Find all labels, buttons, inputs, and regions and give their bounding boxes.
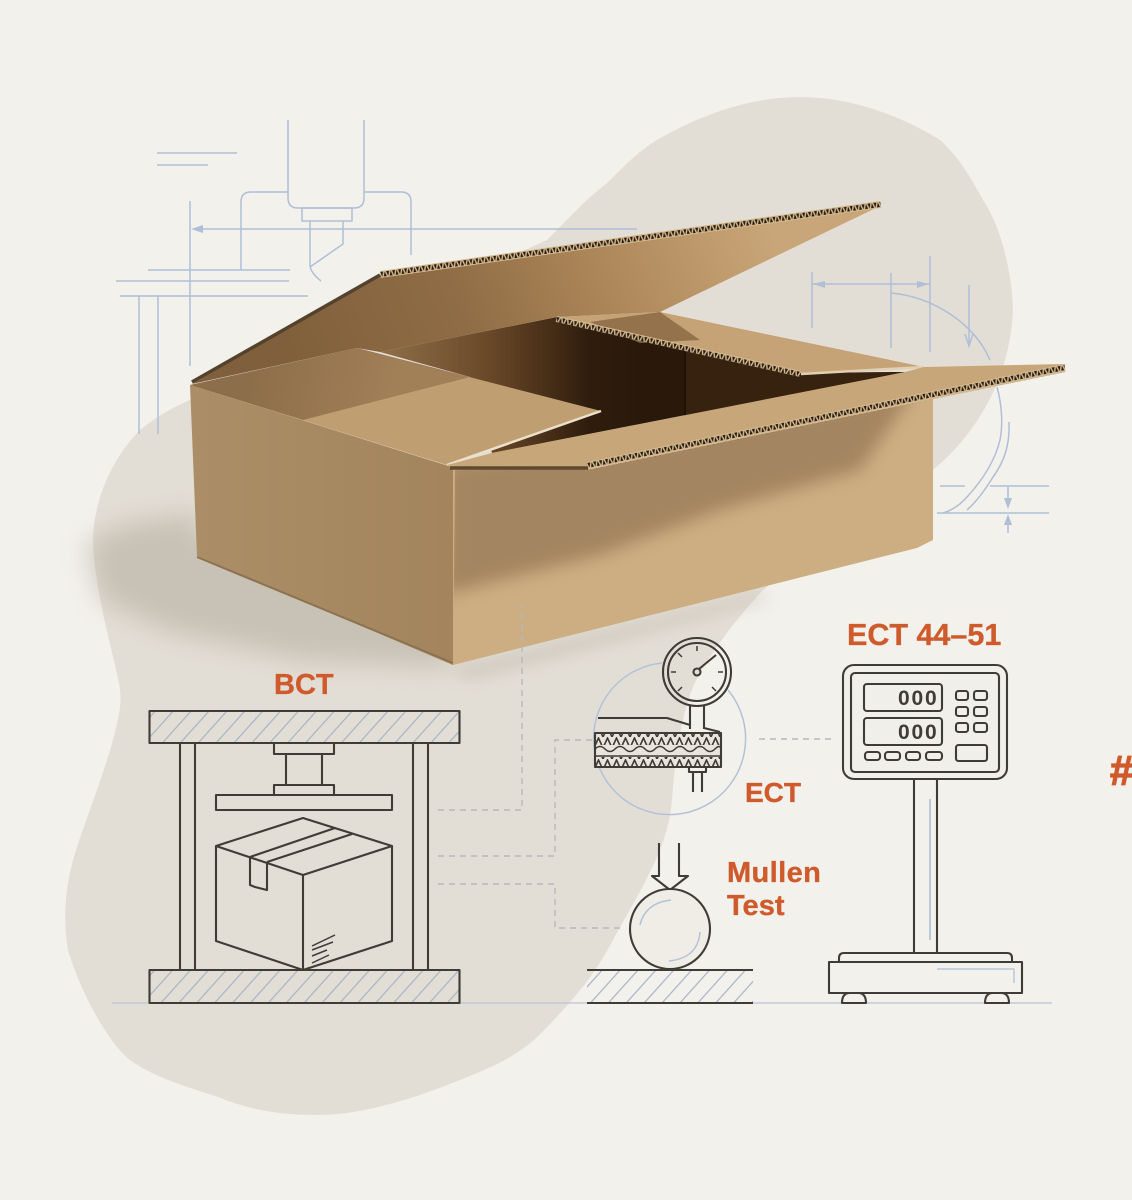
left flap thin edge bbox=[447, 411, 601, 465]
pole bbox=[914, 779, 937, 953]
cardboard box bbox=[190, 201, 1066, 665]
display two: 000 bbox=[898, 721, 938, 744]
background blob bbox=[65, 97, 1013, 1115]
lower stem bbox=[689, 767, 706, 792]
taped box bbox=[216, 818, 392, 970]
label: Mullen Test: Test bbox=[727, 890, 785, 922]
lower buttons bbox=[865, 752, 942, 760]
right back flap bbox=[557, 312, 924, 373]
blueprint: dimension lines and curve, right bbox=[812, 256, 1049, 533]
infographic canvas bbox=[65, 97, 1132, 1115]
press columns bbox=[180, 743, 428, 970]
pole highlight bbox=[929, 799, 931, 940]
label: BCT: BCT bbox=[274, 669, 334, 701]
right back flap thin edge bbox=[801, 367, 924, 374]
down arrow bbox=[652, 843, 688, 890]
ram bbox=[274, 743, 334, 795]
ball highlights bbox=[640, 900, 700, 961]
label: ECT 44–51: ECT 44–51 bbox=[847, 618, 1001, 652]
back flap underside bbox=[192, 207, 878, 384]
Mullen test diagram bbox=[587, 843, 753, 1003]
top plate bbox=[150, 711, 460, 743]
back flap left edge bbox=[192, 275, 380, 382]
box left face bbox=[190, 385, 455, 665]
front flap folded edge bbox=[450, 466, 588, 470]
ECT detail circle bbox=[594, 663, 746, 815]
ball bbox=[630, 889, 710, 969]
bottom plate bbox=[150, 970, 460, 1003]
display head bbox=[843, 665, 1007, 779]
sample cross-section bbox=[595, 733, 721, 767]
shadow on right back flap bbox=[590, 312, 700, 343]
front flap bbox=[447, 364, 1065, 470]
label: Mullen Test: Mullen bbox=[727, 857, 821, 889]
left flap bbox=[190, 348, 601, 465]
box interior bbox=[380, 317, 905, 453]
display one: 000 bbox=[898, 687, 938, 710]
ground shadow of box bbox=[85, 512, 770, 680]
back flap corrugated edge bbox=[380, 201, 881, 278]
press platen bbox=[216, 795, 392, 810]
gauge neck bbox=[690, 705, 704, 729]
dial gauge bbox=[663, 638, 731, 706]
ground block bbox=[587, 970, 753, 1003]
display two bbox=[864, 718, 942, 745]
base line bbox=[112, 1002, 1052, 1004]
connector dashed lines bbox=[438, 605, 835, 928]
box right face bbox=[453, 370, 933, 665]
platform scale bbox=[829, 665, 1022, 1003]
blueprint: machine head, top left bbox=[116, 120, 637, 434]
right back flap corrugated edge bbox=[556, 316, 801, 377]
scale base bbox=[829, 953, 1022, 1003]
keypad bbox=[956, 691, 987, 761]
clamp profile bbox=[598, 718, 720, 732]
left flap shadow bbox=[190, 348, 470, 420]
display one bbox=[864, 684, 942, 711]
label: Mullen Test bbox=[727, 857, 821, 922]
BCT press diagram bbox=[150, 711, 460, 1003]
shadow cast on right face bbox=[445, 390, 915, 595]
ECT gauge and sample bbox=[595, 638, 731, 792]
front flap corrugated edge bbox=[587, 364, 1066, 470]
base edge strip bbox=[197, 557, 453, 663]
label: ECT: ECT bbox=[745, 777, 801, 808]
